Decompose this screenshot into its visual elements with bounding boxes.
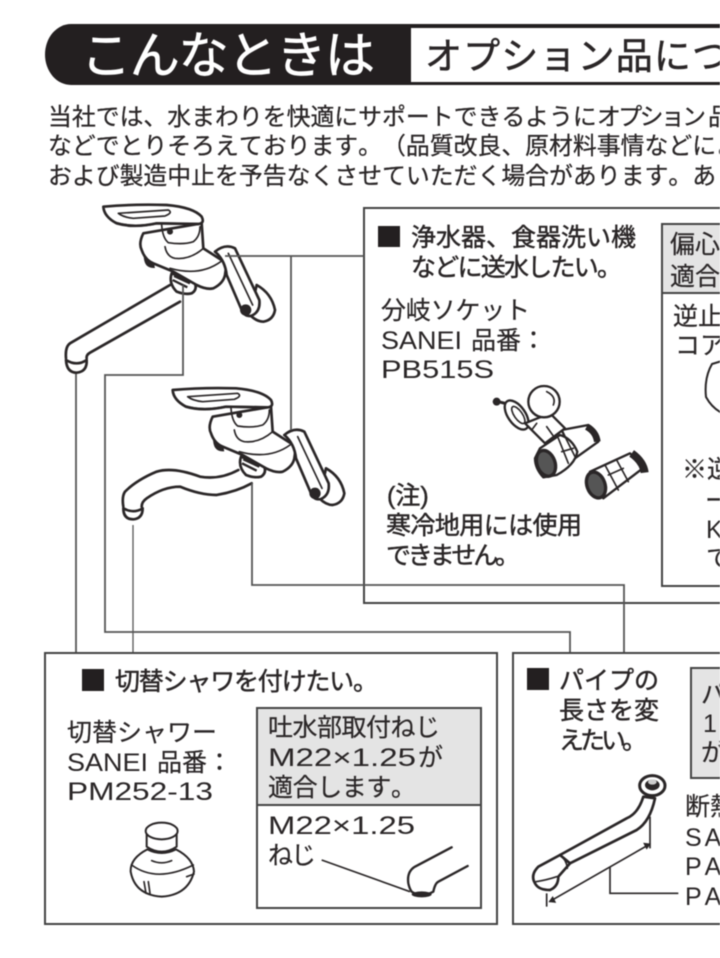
inner table: eccentric pipe: 適合 — [670, 263, 720, 291]
heading: pipe length: パイプの — [559, 667, 659, 695]
inner table: spout thread: M22×1.25 — [268, 744, 416, 772]
inner table: spout thread — [257, 708, 481, 908]
heading: switching shower: 切替シャワを付けたい。 — [115, 668, 378, 696]
inner table: spout thread: が — [418, 744, 443, 772]
note: cold regions — [386, 482, 582, 570]
inner table: spout thread: 吐水部取付ねじ — [268, 714, 440, 742]
icon: pipe with dimension — [533, 776, 678, 907]
product label: branch socket: PB515S — [381, 356, 494, 384]
inner table: eccentric pipe — [662, 224, 720, 586]
icon: branch socket — [493, 386, 645, 501]
inner table: pipe note — [691, 668, 720, 778]
panel: switching shower — [45, 653, 497, 924]
inner table: eccentric pipe: 偏心 — [670, 231, 720, 259]
product label: switching shower: PM252-13 — [67, 778, 213, 806]
inner table: pipe note: 1 — [703, 710, 717, 738]
note: cold regions: 寒冷地用には使用 — [386, 512, 582, 540]
product label: insulated pipe — [685, 793, 720, 911]
inner table: spout thread: M22×1.25 — [268, 812, 415, 840]
note: cold regions: (注) — [387, 482, 429, 510]
product label: branch socket: 分岐ソケット — [381, 297, 530, 325]
product label: branch socket — [381, 297, 546, 384]
title: sub heading: オプション品につ — [425, 36, 720, 77]
heading: pipe length: えたい。 — [559, 727, 647, 755]
faucet illustration: curved spout — [123, 388, 344, 519]
intro text: などでとりそろえております。（品質改良、原材料事情などによ — [48, 133, 720, 160]
product label: switching shower: 切替シャワー — [67, 719, 217, 747]
inner table: spout thread: ねじ — [268, 842, 316, 870]
heading: water purifier — [378, 224, 636, 282]
title: main heading: こんなときは — [81, 28, 375, 84]
product label: switching shower: 品番： — [157, 749, 232, 777]
inner table: spout thread: 適合します。 — [268, 774, 416, 802]
intro text: オプション — [597, 104, 706, 131]
product label: branch socket: SANEI — [381, 327, 462, 355]
heading: water purifier: 浄水器、食器洗い機 — [411, 224, 636, 252]
icon: spout tip with leader — [322, 847, 468, 897]
heading: pipe length: 長さを変 — [559, 697, 659, 725]
product label: branch socket: 品番： — [471, 327, 546, 355]
title bar — [45, 24, 720, 85]
intro text: および製造中止を予告なくさせていただく場合があります。あら — [48, 163, 720, 190]
icon: shower adapter — [131, 823, 194, 897]
connector lines — [76, 256, 624, 653]
panel: pipe length — [513, 653, 720, 924]
intro text — [48, 104, 720, 190]
intro text: 当社では、水まわりを快適にサポートできるように — [48, 104, 597, 131]
panel: water purifier — [364, 208, 720, 603]
heading: pipe length — [527, 667, 659, 755]
note: cold regions: できません。 — [386, 542, 520, 570]
product label: switching shower — [67, 719, 232, 806]
heading: water purifier: などに送水したい。 — [411, 254, 622, 282]
product label: switching shower: SANEI — [67, 749, 148, 777]
faucet illustration: straight spout — [66, 205, 275, 373]
